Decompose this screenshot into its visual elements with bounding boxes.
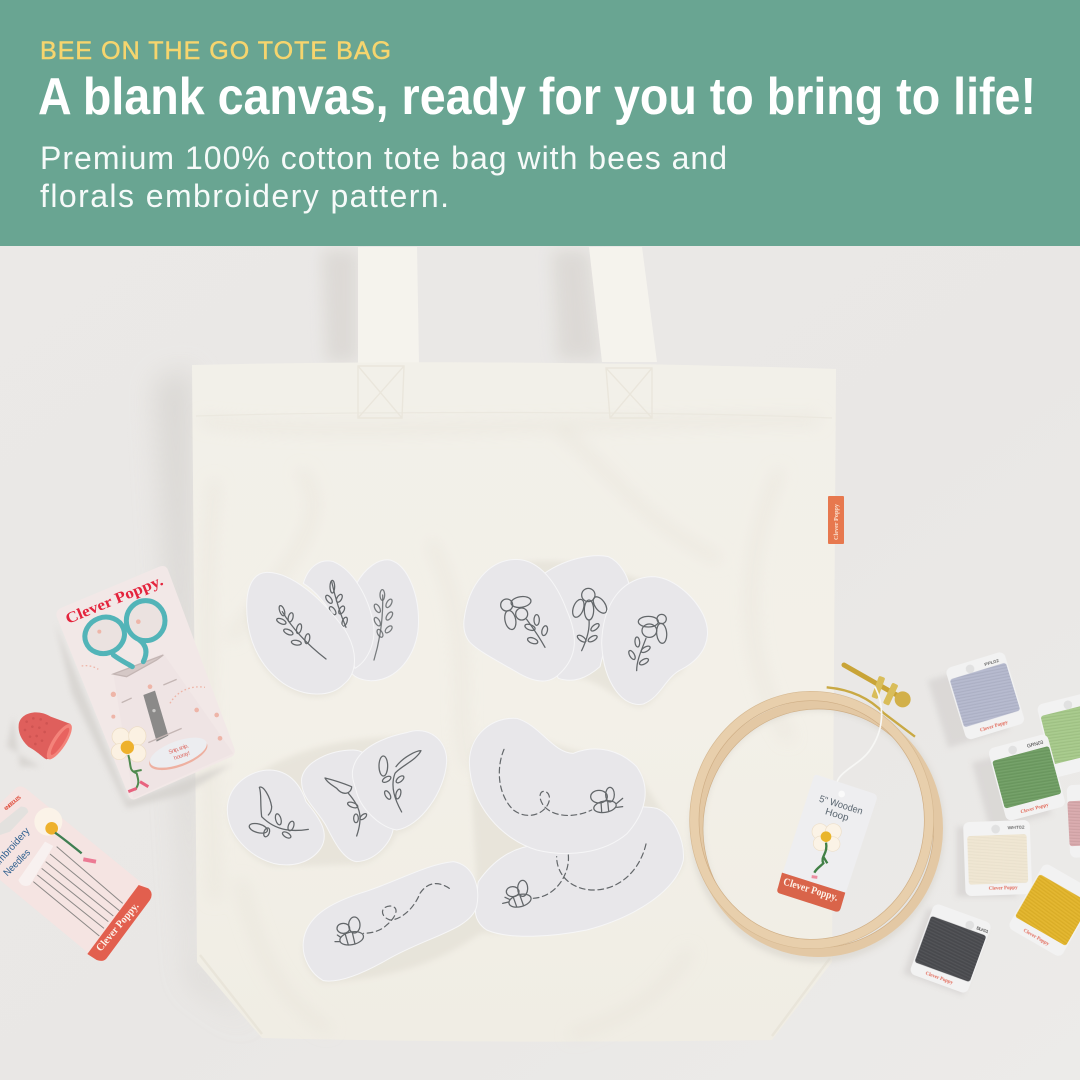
6 needles label: 6 NEEDLES <box>3 794 23 812</box>
hang tag: Hoop <box>824 806 850 824</box>
speech bubble: Snip, snip, <box>168 743 190 756</box>
skein: PPL02: Clever Poppy <box>980 720 1009 734</box>
needle pack <box>0 786 152 961</box>
handle stitch box left <box>358 366 404 418</box>
orange side label <box>828 496 844 544</box>
needle holder <box>18 842 53 886</box>
pack flower <box>34 808 96 862</box>
speech bubble: hooray! <box>173 750 191 762</box>
patch: upper bud <box>352 731 447 830</box>
patch group: bee trails <box>303 718 683 981</box>
patch: middle flower <box>540 556 629 680</box>
handle stitch box right <box>606 368 652 418</box>
skein: PPL02 <box>945 651 1026 741</box>
brass screw <box>827 665 915 737</box>
thimble <box>19 712 76 763</box>
skein: BLK01: Clever Poppy <box>924 972 954 986</box>
red brand band <box>87 885 152 961</box>
skein: pink <box>1066 783 1080 858</box>
patch: left flower <box>464 559 574 681</box>
patch: front sprig <box>247 572 355 694</box>
shadows for notions <box>7 623 233 808</box>
patch: middle bud <box>302 750 393 862</box>
patch: upper bee <box>469 718 645 854</box>
shadows for skeins <box>903 662 1051 995</box>
bag body <box>192 362 836 1042</box>
fabric folds <box>200 420 820 1035</box>
patch: right sprig <box>352 560 418 681</box>
hang tag <box>777 775 877 912</box>
scissor blade <box>143 691 168 742</box>
needles <box>33 847 123 936</box>
skein: WHT02 <box>963 820 1032 896</box>
tag string <box>837 687 882 794</box>
tag title: 5" Wooden <box>818 794 864 817</box>
left handle <box>358 247 419 364</box>
patch shadows <box>228 561 692 983</box>
patch: lower left bee <box>303 862 478 981</box>
patch: middle sprig <box>303 561 374 668</box>
speech bubble <box>145 731 211 776</box>
subtitle: Premium 100% cotton tote bag with bees and <box>40 140 727 176</box>
skein: WHT02: Clever Poppy <box>989 886 1018 892</box>
patch: lower right bee <box>475 807 683 936</box>
skein: WHT02: WHT02 <box>1008 824 1025 831</box>
header banner: florals embroidery pattern. <box>40 178 449 214</box>
bottom seam <box>200 955 830 1036</box>
tag flower <box>812 824 841 877</box>
right handle <box>589 247 657 362</box>
skein: GRN03 <box>988 733 1066 822</box>
skein: GRN03: Clever Poppy <box>1020 803 1050 815</box>
needle pack: Clever Poppy. <box>95 901 142 954</box>
skein: GRN03: GRN03 <box>1027 740 1044 750</box>
top hem stitching <box>196 412 832 418</box>
flower mascot <box>111 727 148 792</box>
orange side label: Clever Poppy <box>834 504 840 540</box>
patch group: buds <box>227 731 447 865</box>
patch group: flowers <box>464 556 707 704</box>
skein: PPL02: PPL02 <box>984 658 1000 668</box>
scissors card <box>56 566 235 799</box>
patch: right flower <box>602 577 707 704</box>
bag shadow <box>155 368 250 1025</box>
tag brand: Clever Poppy. <box>782 877 839 904</box>
pattern dots <box>97 619 222 741</box>
background surface <box>0 246 1080 1080</box>
brand: Clever Poppy: Clever Poppy. <box>63 572 166 628</box>
patch group: leaf sprigs <box>247 560 418 694</box>
wooden hoop <box>690 691 938 956</box>
left notions: scissors, thimble, needles <box>0 566 235 961</box>
patch: left bud <box>227 770 324 865</box>
skein: yellow: Clever Poppy <box>1022 929 1050 948</box>
skein: yellow <box>1007 862 1080 958</box>
card slots <box>113 655 182 743</box>
hoop and threads <box>690 651 1080 995</box>
skein: light green <box>1036 690 1080 778</box>
scissor handles <box>80 601 165 667</box>
skein: BLK01: BLK01 <box>975 925 990 935</box>
handle shadows <box>322 250 601 362</box>
hang hole <box>0 807 28 835</box>
tote bag <box>155 247 844 1042</box>
header banner <box>0 0 1080 246</box>
skein: BLK01 <box>909 903 992 994</box>
eyebrow: BEE ON THE GO TOTE BAG <box>40 37 391 65</box>
embroidery patches <box>227 556 707 983</box>
thread skeins <box>903 651 1080 995</box>
needle pack: Needles <box>2 847 33 879</box>
